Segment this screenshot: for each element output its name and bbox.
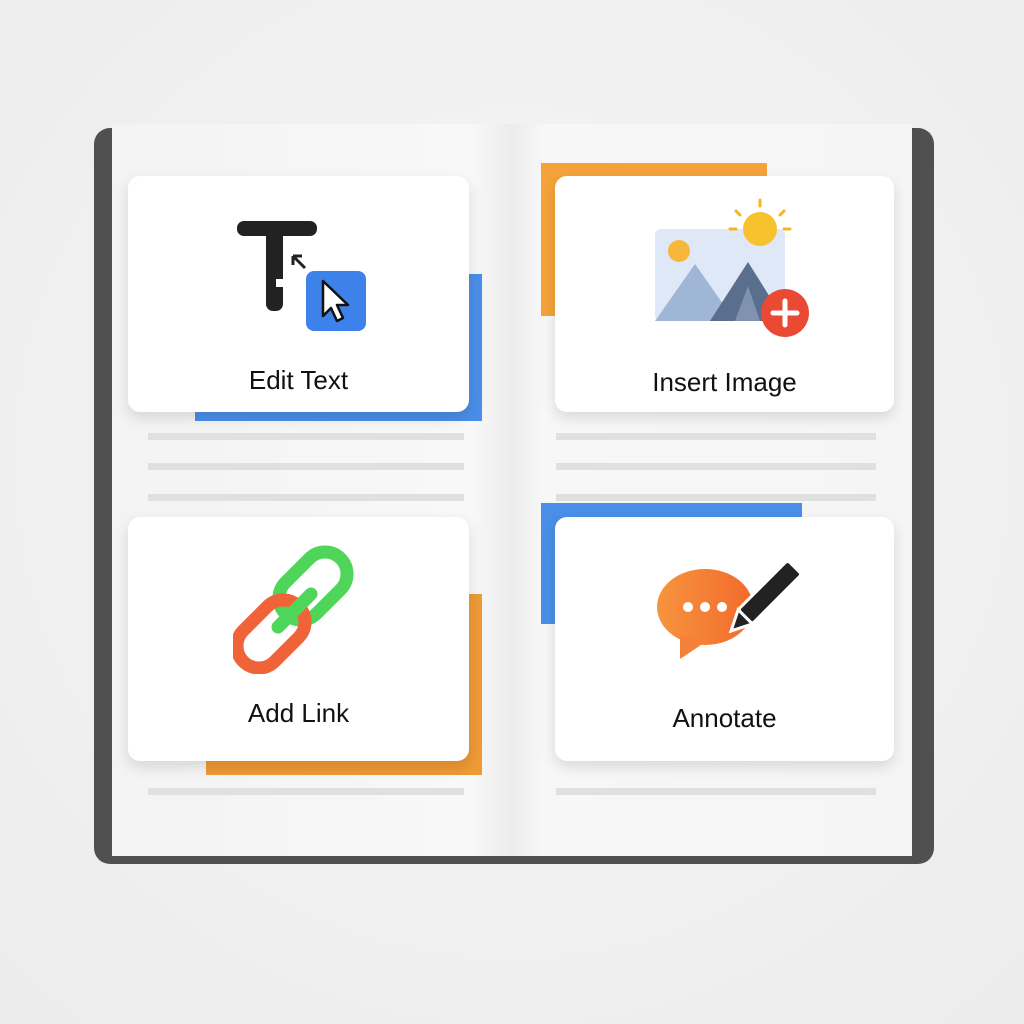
left page bbox=[112, 124, 511, 856]
label: Edit Text bbox=[249, 365, 348, 395]
icon: speech bubble and pen bbox=[657, 563, 800, 659]
icon: chain link bbox=[233, 546, 354, 674]
icon: text cursor bbox=[237, 221, 366, 331]
panel: insert image bbox=[555, 176, 894, 412]
panel: edit text bbox=[128, 176, 469, 412]
right page bbox=[511, 124, 912, 856]
accent: orange insert image bbox=[541, 163, 767, 316]
panel: annotate bbox=[555, 517, 894, 761]
book cover bbox=[94, 128, 934, 864]
label: Add Link bbox=[248, 698, 349, 728]
label: Insert Image bbox=[652, 367, 797, 397]
accent: blue edit text bbox=[195, 274, 482, 421]
label: Annotate bbox=[672, 703, 777, 733]
accent: orange add link bbox=[206, 594, 482, 775]
accent: blue annotate bbox=[541, 503, 802, 624]
panel: add link bbox=[128, 517, 469, 761]
icon: image with plus bbox=[655, 198, 809, 337]
